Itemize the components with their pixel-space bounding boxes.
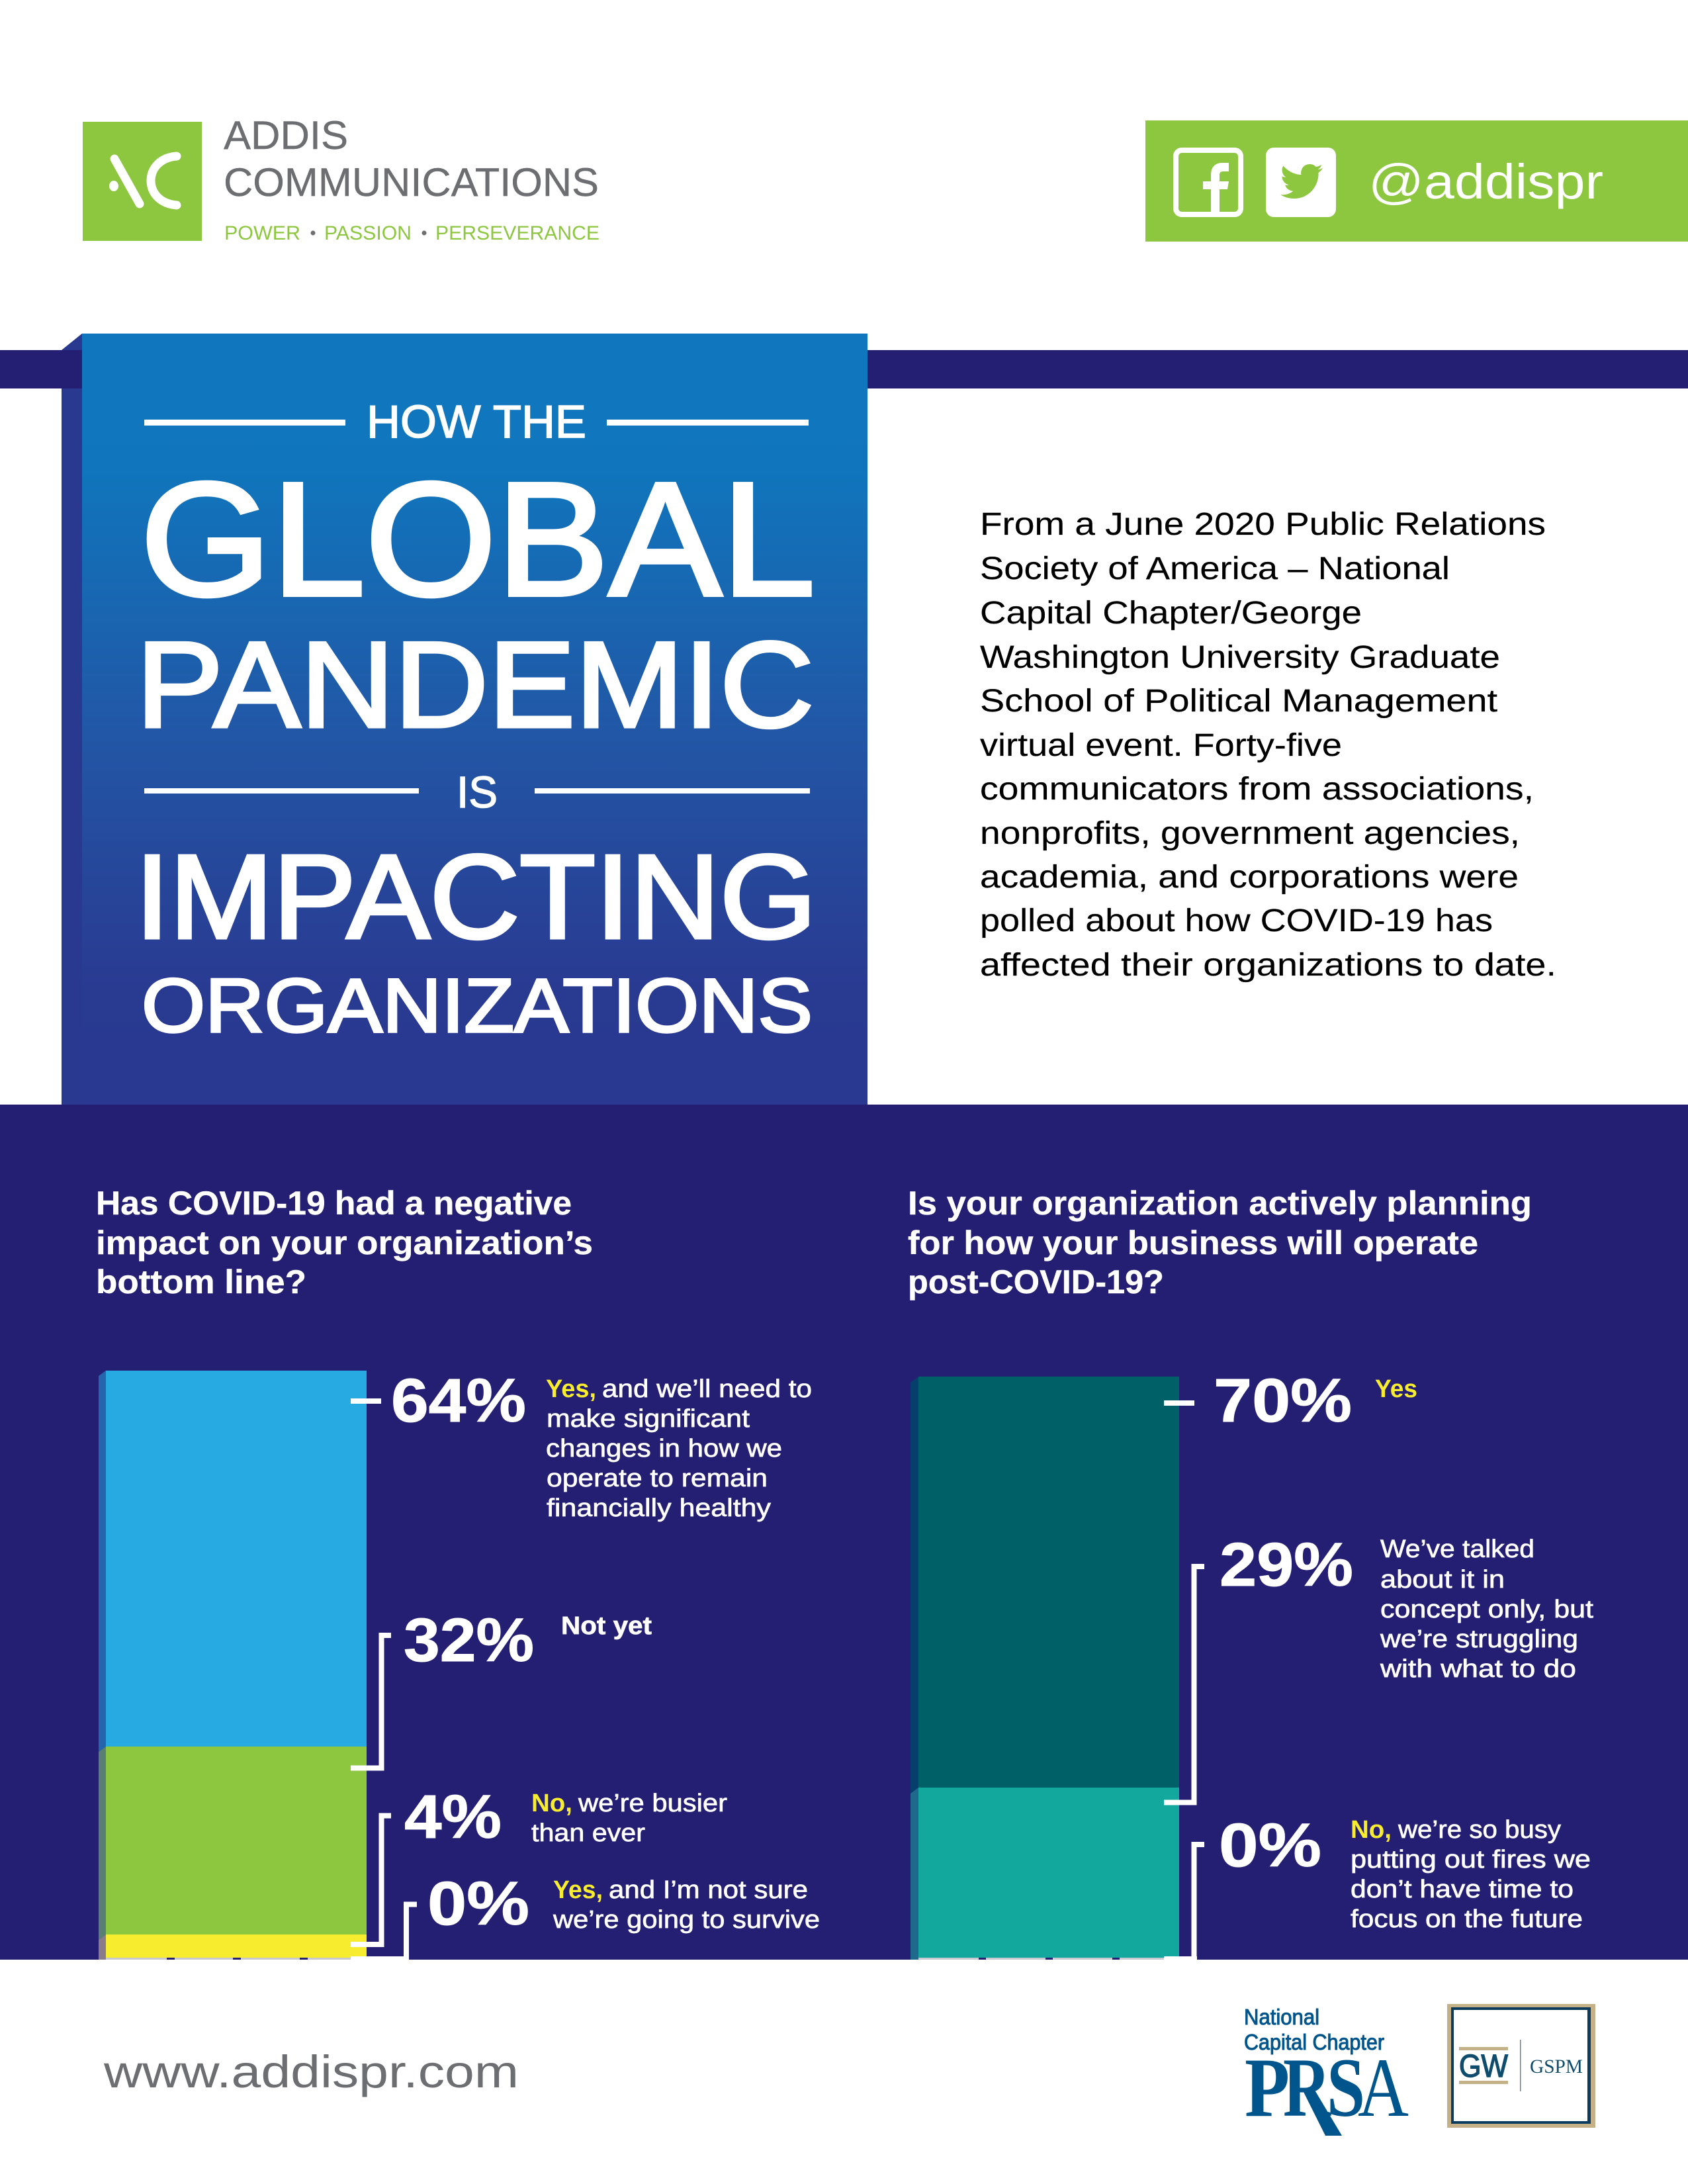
heading: planning question: Is your organization actively planning [908, 1185, 1532, 1222]
stat: 64 percent: 64% [391, 1366, 526, 1435]
heading: bottom line question: impact on your organization’s [96, 1224, 593, 1261]
stat: 0 percent survive: Yes, [553, 1876, 603, 1904]
logo: PRSA National Capital Chapter: P [1245, 2042, 1290, 2134]
intro text: From a June 2020 Public Relations [980, 507, 1546, 542]
stat: 64 percent [351, 1366, 812, 1522]
title: pandemic: PANDEMIC [136, 616, 814, 752]
stat: 64 percent: make significant [547, 1405, 750, 1433]
logo tagline: POWER [224, 222, 300, 244]
title: how the: HOW THE [367, 396, 586, 447]
title: global: GLOBAL [140, 449, 815, 629]
logo: PRSA National Capital Chapter: R [1283, 2042, 1331, 2134]
stat: 32 percent: Not yet [561, 1612, 652, 1640]
logo tagline: PASSION [324, 222, 412, 244]
stat: 64 percent: financially healthy [547, 1494, 771, 1522]
stat: 29 percent: about it in [1380, 1566, 1505, 1594]
stat: 70 percent: Yes [1375, 1375, 1417, 1403]
icon: twitter [1266, 148, 1336, 217]
icon: facebook [1176, 150, 1241, 214]
stat: 0 percent no plans: No, [1351, 1816, 1392, 1844]
stat: 32 percent [351, 1606, 652, 1768]
stat: 29 percent: we’re struggling [1380, 1625, 1578, 1653]
title panel [0, 334, 867, 1105]
stat: 0 percent no plans: we’re so busy [1398, 1816, 1561, 1844]
logo mark: AC monogram [83, 122, 202, 241]
logo wordmark: ADDIS [224, 113, 348, 158]
logo tagline: PERSEVERANCE [435, 222, 600, 244]
logo: GW GSPM [1447, 2004, 1595, 2128]
stat: 64 percent: changes in how we [546, 1435, 782, 1463]
stat: 4 percent: 4% [404, 1782, 502, 1851]
chart: bottom line stacked bar [99, 1371, 367, 1960]
logo wordmark: COMMUNICATIONS [224, 160, 599, 205]
stat: 0 percent no plans: 0% [1219, 1811, 1321, 1880]
stat: 29 percent: with what to do [1380, 1655, 1576, 1683]
title: how the [144, 396, 809, 447]
chart: planning stacked bar [911, 1377, 1179, 1960]
stat: 70 percent: 70% [1214, 1366, 1352, 1435]
stat: 4 percent [351, 1782, 727, 1944]
stat: 4 percent: No, [531, 1790, 572, 1817]
intro text [980, 507, 1556, 983]
stat: 64 percent: and we’ll need to [602, 1375, 812, 1403]
logo: GW GSPM: GW [1459, 2049, 1509, 2084]
stat: 0 percent no plans: putting out fires we [1351, 1846, 1591, 1874]
stat: 0 percent survive: 0% [427, 1869, 529, 1938]
intro text: virtual event. Forty-five [980, 728, 1342, 763]
heading: planning question: for how your business will operate [908, 1224, 1478, 1261]
stat: 0 percent no plans: don’t have time to [1351, 1876, 1574, 1903]
intro text: affected their organizations to date. [980, 948, 1556, 983]
social media bar [1145, 120, 1688, 242]
intro text: academia, and corporations were [980, 860, 1519, 895]
heading: bottom line question: Has COVID-19 had a negative [96, 1185, 572, 1222]
stat: 4 percent: than ever [531, 1819, 645, 1847]
intro text: Capital Chapter/George [980, 596, 1362, 631]
stat: 29 percent: 29% [1220, 1530, 1353, 1599]
title: is: IS [457, 768, 498, 817]
stat: 4 percent: we’re busier [578, 1790, 727, 1817]
logo: PRSA National Capital Chapter: S [1327, 2042, 1365, 2134]
stat: 29 percent: concept only, but [1380, 1596, 1593, 1623]
intro text: School of Political Management [980, 684, 1497, 719]
heading: planning question [908, 1185, 1532, 1300]
intro text: Society of America – National [980, 551, 1450, 586]
panel: survey results [0, 1105, 1688, 1960]
stat: 0 percent survive: we’re going to survive [553, 1906, 820, 1934]
intro text: nonprofits, government agencies, [980, 816, 1520, 851]
title: organizations: ORGANIZATIONS [142, 964, 813, 1048]
stat: 0 percent no plans [1164, 1811, 1591, 1960]
title band [0, 350, 1688, 388]
stat: 0 percent no plans: focus on the future [1351, 1905, 1583, 1933]
logo: PRSA National Capital Chapter: A [1358, 2042, 1409, 2134]
logo tagline [224, 222, 600, 244]
stat: 29 percent [1164, 1530, 1593, 1803]
title: is [144, 768, 810, 817]
stat: 64 percent: operate to remain [547, 1465, 768, 1492]
heading: planning question: post-COVID-19? [908, 1263, 1164, 1300]
heading: bottom line question: bottom line? [96, 1263, 306, 1300]
intro text: communicators from associations, [980, 772, 1534, 807]
stat: 0 percent survive: and I’m not sure [609, 1876, 808, 1904]
intro text: polled about how COVID-19 has [980, 903, 1493, 938]
stat: 64 percent: Yes, [546, 1375, 596, 1403]
intro text: Washington University Graduate [980, 640, 1500, 675]
logo: Addis Communications [83, 113, 600, 244]
heading: bottom line question [96, 1185, 593, 1300]
logo: PRSA National Capital Chapter: National [1244, 2005, 1319, 2029]
website url: www.addispr.com [103, 2046, 519, 2097]
stat: 0 percent survive [351, 1869, 820, 1960]
logo: GW GSPM: GSPM [1530, 2056, 1583, 2077]
logo: PRSA National Capital Chapter: Capital Chapter [1244, 2030, 1384, 2054]
stat: 70 percent [1164, 1366, 1417, 1435]
title: impacting: IMPACTING [135, 831, 817, 964]
logo: PRSA National Capital Chapter [1244, 2005, 1409, 2136]
stat: 29 percent: We’ve talked [1380, 1535, 1534, 1563]
social handle: @addispr [1368, 154, 1603, 209]
stat: 32 percent: 32% [404, 1606, 534, 1674]
logo wordmark [224, 113, 599, 205]
